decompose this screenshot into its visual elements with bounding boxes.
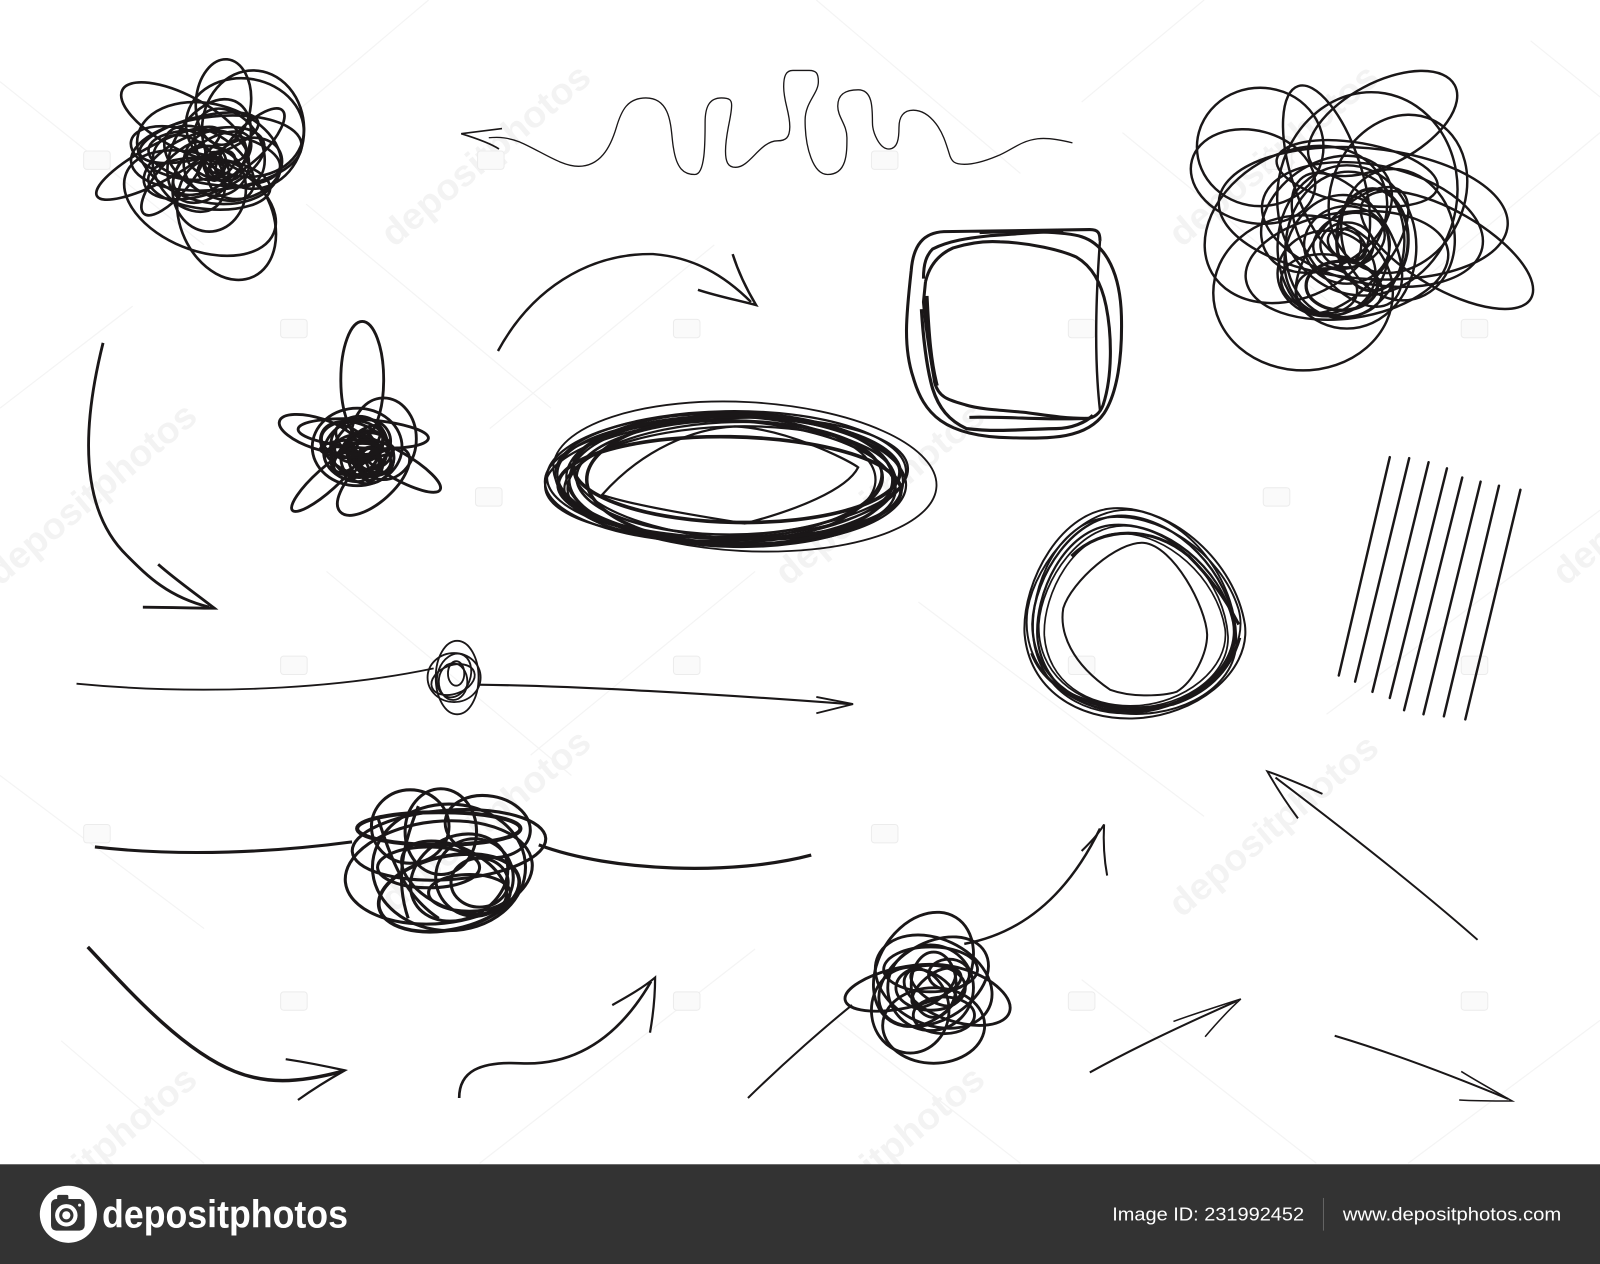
arrow: straight arrow pointing up-right — [1090, 999, 1241, 1072]
scribble: line with thick knot — [95, 789, 811, 944]
image id: Image ID: 231992452 — [1112, 1203, 1304, 1224]
arrow: curved arrow pointing right — [498, 254, 756, 351]
watermark: repeated stock-photo marks: depositphotos — [767, 394, 992, 593]
arrow: tangle with line going up-right — [748, 824, 1107, 1098]
arrow: long wavy line pointing left — [461, 70, 1072, 174]
arrow: long curved arrow pointing down-right — [89, 343, 214, 608]
scribble: rounded square — [906, 230, 1122, 438]
footer bar — [0, 1164, 1600, 1264]
arrow: thin line with small knot — [77, 641, 853, 714]
watermark: repeated stock-photo marks: depositphotos — [373, 55, 598, 254]
arrow: straight arrow pointing down-right — [1335, 1036, 1512, 1101]
watermark: repeated stock-photo marks: depositphotos — [1160, 55, 1386, 254]
scribble: small tangle with top loop — [275, 321, 447, 527]
hatch lines — [1339, 457, 1520, 719]
logo wordmark: depositphotos — [102, 1194, 348, 1237]
scribble: large oval — [542, 392, 940, 561]
arrow: thick curved arrow bottom-left — [88, 947, 345, 1100]
scribble: top-right large tangle — [1176, 49, 1550, 370]
watermark: repeated stock-photo marks: depositphotos — [373, 721, 598, 919]
arrow: s-curve arrow pointing up — [459, 978, 655, 1098]
arrow: straight arrow pointing up-left — [1267, 771, 1478, 940]
website url: www.depositphotos.com — [1342, 1203, 1561, 1224]
logo: camera in circle — [40, 1186, 97, 1243]
watermark: repeated stock-photo marks: depositphotos — [767, 1057, 992, 1256]
scribble: top-left tangle — [88, 57, 312, 296]
scribble: rounded triangle circle — [1010, 493, 1260, 734]
watermark: repeated stock-photo marks: depositphotos — [1160, 726, 1386, 924]
